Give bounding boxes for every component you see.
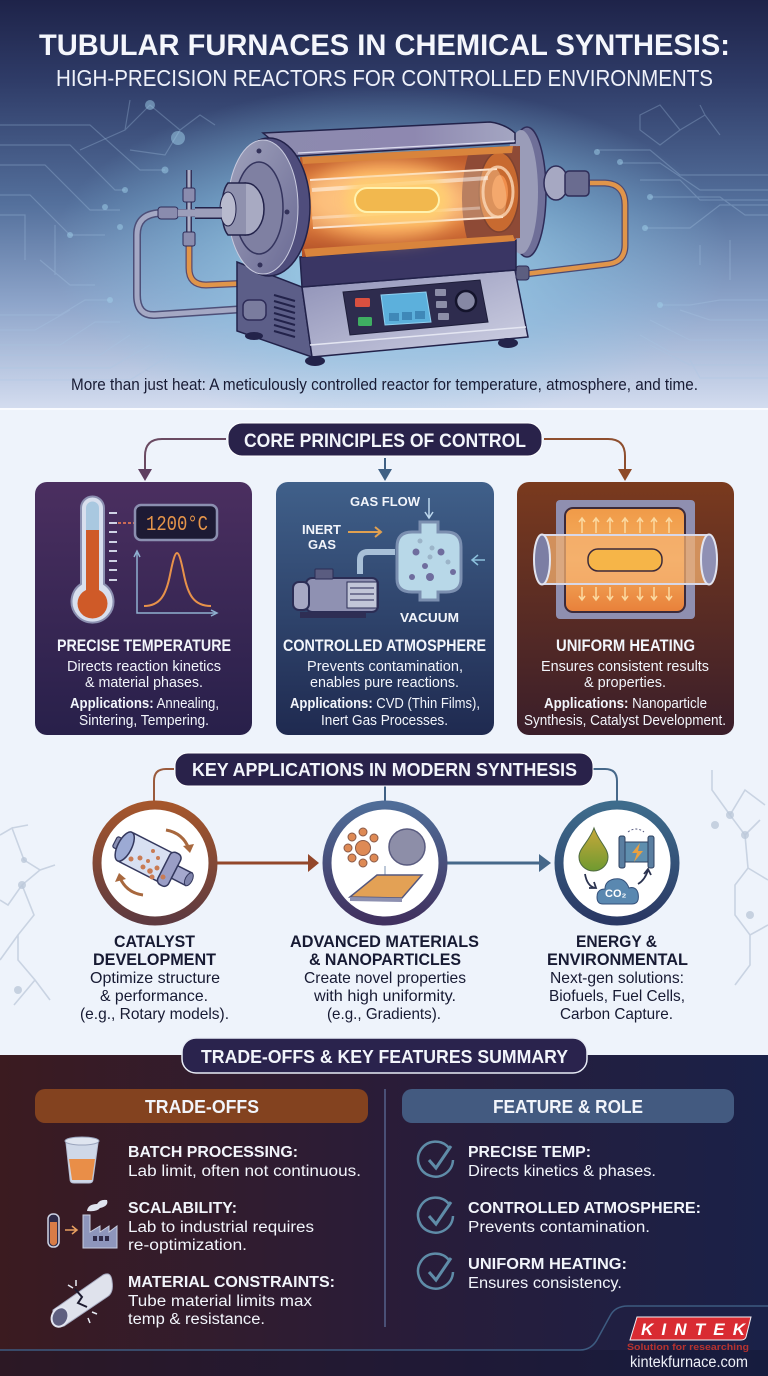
- card description: & material phases.: [85, 674, 203, 691]
- lower hood: [300, 240, 516, 287]
- icon: beaker: [65, 1137, 99, 1183]
- right flange: [508, 127, 546, 257]
- card heading: PRECISE TEMPERATURE: [57, 637, 231, 655]
- heading: trade-offs and features: TRADE-OFFS & KEY FEATURES SUMMARY: [201, 1046, 569, 1067]
- heading: BATCH PROCESSING:: [128, 1144, 298, 1161]
- control panel: [343, 280, 488, 335]
- icon: rotary tube: [97, 805, 213, 921]
- label: ENVIRONMENTAL: [547, 950, 688, 969]
- tagline: Solution for researching: [627, 1342, 749, 1353]
- label: CATALYST: [114, 932, 196, 951]
- description: Carbon Capture.: [560, 1006, 673, 1023]
- chart: temperature peak: [134, 551, 217, 616]
- item: uniform heating: [418, 1254, 627, 1292]
- application: catalyst development: [80, 805, 229, 1023]
- logo: kintek: KINTEK: [641, 1320, 747, 1339]
- arrow: side inlet: [472, 555, 485, 565]
- description: [128, 1293, 312, 1328]
- card description: [541, 658, 709, 691]
- description: Prevents contamination.: [468, 1219, 650, 1236]
- icon: cracked tube: [49, 1274, 112, 1329]
- icon: biofuel, fuel cell, carbon: CO₂: [605, 888, 626, 900]
- logo: kintek: [627, 1317, 751, 1353]
- left flange: [228, 138, 310, 276]
- icon: temperature display: [135, 505, 217, 540]
- card description: Ensures consistent results: [541, 658, 709, 675]
- card applications: Synthesis, Catalyst Development.: [524, 713, 726, 729]
- arrow: catalyst to materials: [217, 854, 319, 872]
- description: temp & resistance.: [128, 1311, 265, 1328]
- panel: summary background: [0, 1055, 768, 1376]
- header: feature and role: FEATURE & ROLE: [493, 1097, 643, 1117]
- card applications: [70, 696, 219, 729]
- description: [80, 970, 229, 1023]
- heading: core principles: CORE PRINCIPLES OF CONTROL: [244, 431, 526, 452]
- heading: PRECISE TEMP:: [468, 1144, 591, 1161]
- caption: More than just heat: A meticulously controlled reactor for temperature, atmosphere, and time.: [71, 375, 698, 394]
- title: TUBULAR FURNACES IN CHEMICAL SYNTHESIS:: [39, 29, 730, 62]
- heading: CONTROLLED ATMOSPHERE:: [468, 1200, 701, 1217]
- card description: Prevents contamination,: [307, 658, 463, 675]
- arrow: to controlled atmosphere: [378, 458, 392, 481]
- item: scalability: [48, 1200, 314, 1254]
- arrow: materials to energy: [447, 854, 551, 872]
- label: [547, 932, 688, 969]
- application: energy and environmental: [547, 805, 688, 1023]
- card applications: Applications: Annealing,: [70, 696, 219, 712]
- valve: [186, 170, 192, 240]
- item: material constraints: [49, 1274, 335, 1329]
- description: with high uniformity.: [313, 988, 456, 1005]
- icon: check: [418, 1198, 453, 1233]
- icon: lab to factory: [48, 1200, 117, 1248]
- card heading: CONTROLLED ATMOSPHERE: [283, 637, 486, 655]
- card heading: UNIFORM HEATING: [556, 637, 695, 655]
- label: [93, 932, 217, 969]
- icon: check: [418, 1254, 453, 1289]
- heading: UNIFORM HEATING:: [468, 1256, 627, 1273]
- description: [304, 970, 466, 1023]
- card applications: [524, 696, 726, 729]
- base: [237, 262, 529, 366]
- application: advanced materials: [290, 805, 479, 1023]
- icon: temperature display: 1200°C: [146, 514, 208, 537]
- panel: middle background: [0, 408, 768, 1055]
- pipe: right orange loop: [525, 183, 625, 274]
- top hood: [263, 122, 515, 156]
- item: controlled atmosphere: [418, 1198, 701, 1236]
- label: DEVELOPMENT: [93, 950, 217, 969]
- label: gas flow: GAS FLOW: [350, 494, 421, 509]
- description: Tube material limits max: [128, 1293, 312, 1310]
- label: inert gas: GAS: [308, 537, 336, 552]
- arrow: gas flow: [425, 498, 433, 518]
- heading: SCALABILITY:: [128, 1200, 237, 1217]
- description: (e.g., Rotary models).: [80, 1006, 229, 1023]
- card description: & properties.: [584, 674, 666, 691]
- description: Next-gen solutions:: [550, 970, 684, 987]
- label: ADVANCED MATERIALS: [290, 932, 479, 951]
- panel: controlled atmosphere: [276, 482, 494, 735]
- icon: thermometer: [72, 497, 134, 623]
- glass tube: [310, 169, 506, 228]
- icon: check: [418, 1142, 453, 1177]
- card description: [307, 658, 463, 691]
- left hub: [228, 183, 264, 235]
- icon: biofuel, fuel cell, carbon: [559, 805, 675, 921]
- header: feature and role: [402, 1089, 734, 1123]
- pipe: left orange: [189, 240, 252, 285]
- description: [549, 970, 685, 1023]
- arrow: to precise temperature: [138, 439, 226, 481]
- description: Create novel properties: [304, 970, 466, 987]
- item: batch processing: [65, 1137, 361, 1183]
- icon: reaction chamber: [397, 522, 461, 600]
- description: Optimize structure: [90, 970, 220, 987]
- heating chamber: [300, 146, 516, 257]
- card applications: Sintering, Tempering.: [79, 713, 209, 729]
- card description: [67, 658, 221, 691]
- label: ENERGY &: [576, 932, 657, 951]
- panel: hero: [0, 0, 768, 425]
- description: & performance.: [100, 988, 208, 1005]
- heading: key applications: KEY APPLICATIONS IN MODERN SYNTHESIS: [192, 759, 577, 780]
- card applications: Applications: CVD (Thin Films),: [290, 696, 480, 712]
- heading: key applications: [154, 753, 617, 802]
- header: trade-offs: TRADE-OFFS: [145, 1097, 259, 1117]
- sample boat: [345, 178, 449, 222]
- arrow: to uniform heating: [544, 439, 632, 481]
- label: inert gas: [302, 522, 341, 552]
- description: [128, 1219, 314, 1254]
- arrow: inert gas: [348, 527, 381, 537]
- heading: trade-offs and features: [182, 1038, 587, 1073]
- description: Ensures consistency.: [468, 1275, 622, 1292]
- card description: Directs reaction kinetics: [67, 658, 221, 675]
- card description: enables pure reactions.: [310, 674, 459, 691]
- panel: precise temperature: [35, 482, 252, 735]
- description: Biofuels, Fuel Cells,: [549, 988, 685, 1005]
- label: vacuum: VACUUM: [400, 610, 459, 625]
- illustration: tube furnace: [137, 122, 625, 366]
- card applications: [290, 696, 480, 729]
- card applications: Inert Gas Processes.: [321, 713, 448, 729]
- header: trade-offs: [35, 1089, 368, 1123]
- label: & NANOPARTICLES: [309, 950, 461, 969]
- description: (e.g., Gradients).: [327, 1006, 441, 1023]
- icon: vacuum pump: [293, 552, 395, 618]
- website: kintekfurnace.com: [630, 1354, 748, 1371]
- description: Lab to industrial requires: [128, 1219, 314, 1236]
- heading: core principles: [228, 423, 542, 456]
- description: Lab limit, often not continuous.: [128, 1163, 361, 1180]
- panel: uniform heating: [517, 482, 734, 735]
- label: [290, 932, 479, 969]
- description: re-optimization.: [128, 1237, 247, 1254]
- label: inert gas: INERT: [302, 522, 341, 537]
- icon: heated tube: [534, 500, 717, 619]
- icon: nanoparticles and film: [327, 805, 443, 921]
- item: precise temp: [418, 1142, 656, 1180]
- pipe: left grey loop: [137, 213, 245, 315]
- description: Directs kinetics & phases.: [468, 1163, 656, 1180]
- heading: MATERIAL CONSTRAINTS:: [128, 1274, 335, 1291]
- card applications: Applications: Nanoparticle: [544, 696, 707, 712]
